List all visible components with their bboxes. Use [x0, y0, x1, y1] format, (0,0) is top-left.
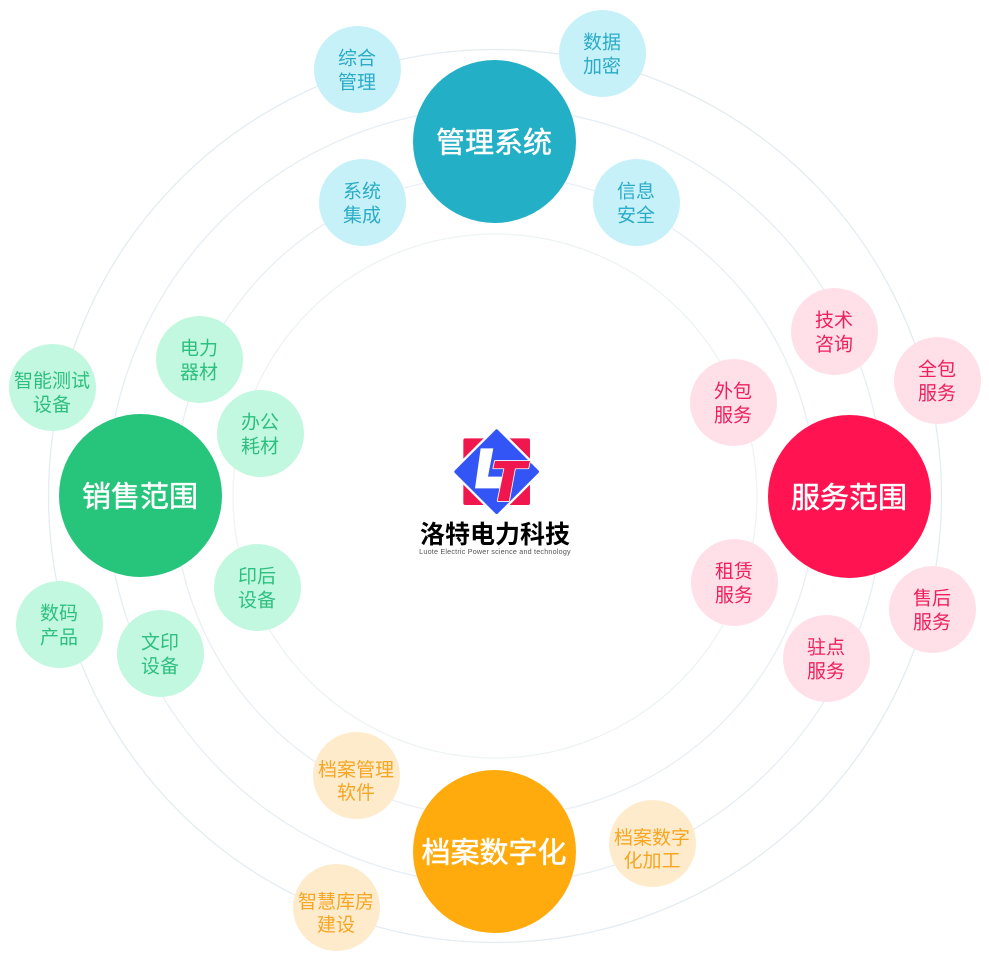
node: 数码产品: 产品: [40, 626, 78, 648]
node: 档案数字化加工: [609, 800, 696, 887]
logo icon: LT diamond: [456, 431, 537, 512]
panel: management systems: [314, 10, 680, 246]
node: 智慧库房建设: [293, 864, 380, 951]
node: 档案管理软件: [313, 732, 400, 819]
node: 信息安全: 安全: [617, 204, 655, 226]
node: 电力器材: 电力: [180, 338, 218, 360]
node: 技术咨询: 技术: [815, 310, 853, 332]
node: 租赁服务: 租赁: [715, 560, 753, 582]
node: 数码产品: [16, 581, 103, 668]
node: 印后设备: 印后: [238, 566, 276, 588]
node: 系统集成: [319, 159, 406, 246]
node: 外包服务: 服务: [714, 404, 752, 426]
node: 租赁服务: [691, 539, 778, 626]
node: 智慧库房建设: 建设: [317, 914, 355, 936]
hub: 档案数字化: 档案数字化: [421, 836, 567, 870]
node: 电力器材: 器材: [180, 362, 218, 384]
node: 智能测试设备: 智能测试: [14, 370, 90, 392]
node: 信息安全: [593, 159, 680, 246]
logo company name: 洛特电力科技: [420, 521, 570, 549]
node: 外包服务: [690, 359, 777, 446]
node: 信息安全: 信息: [617, 180, 655, 202]
node: 全包服务: 服务: [918, 382, 956, 404]
logo english tagline: Luote Electric Power science and technology: [419, 547, 571, 556]
hub: 销售范围: [59, 414, 222, 577]
node: 外包服务: 外包: [714, 380, 752, 402]
node: 售后服务: 售后: [913, 588, 951, 610]
node: 租赁服务: 服务: [715, 584, 753, 606]
panel: service scope: [690, 288, 981, 702]
node: 电力器材: [156, 316, 243, 403]
panel: archive digitization: [293, 732, 696, 951]
node: 智能测试设备: 设备: [33, 394, 71, 416]
node: 印后设备: [214, 544, 301, 631]
node: 综合管理: 管理: [338, 72, 376, 94]
node: 数据加密: [559, 10, 646, 97]
node: 驻点服务: 服务: [807, 660, 845, 682]
node: 智慧库房建设: 智慧库房: [298, 891, 374, 913]
node: 综合管理: 综合: [338, 48, 376, 70]
node: 档案管理软件: 软件: [337, 782, 375, 804]
center logo: [419, 431, 571, 556]
panel: sales scope: [9, 316, 304, 697]
node: 档案管理软件: 档案管理: [318, 759, 394, 781]
node: 技术咨询: 咨询: [815, 334, 853, 356]
node: 驻点服务: [783, 615, 870, 702]
node: 档案数字化加工: 档案数字: [614, 827, 690, 849]
node: 智能测试设备: [9, 344, 96, 431]
node: 办公耗材: 耗材: [241, 436, 279, 458]
node: 办公耗材: 办公: [241, 412, 279, 434]
hub: 档案数字化: [413, 770, 576, 933]
node: 系统集成: 集成: [343, 204, 381, 226]
node: 数据加密: 加密: [583, 56, 621, 78]
node: 技术咨询: [791, 288, 878, 375]
hub: 服务范围: 服务范围: [791, 482, 907, 514]
node: 办公耗材: [217, 390, 304, 477]
hub: 销售范围: 销售范围: [82, 480, 198, 514]
hub: 管理系统: 管理系统: [436, 126, 552, 160]
node: 数码产品: 数码: [40, 602, 78, 624]
hub: 服务范围: [768, 415, 931, 578]
hub: 管理系统: [413, 60, 576, 223]
node: 系统集成: 系统: [343, 180, 381, 202]
node: 全包服务: [894, 337, 981, 424]
node: 档案数字化加工: 化加工: [623, 850, 681, 872]
node: 印后设备: 设备: [238, 590, 276, 612]
node: 售后服务: 服务: [913, 612, 951, 634]
node: 全包服务: 全包: [918, 358, 956, 380]
node: 售后服务: [889, 566, 976, 653]
node: 文印设备: [117, 610, 204, 697]
node: 文印设备: 文印: [141, 632, 179, 654]
node: 文印设备: 设备: [141, 656, 179, 678]
node: 驻点服务: 驻点: [807, 636, 845, 658]
node: 综合管理: [314, 26, 401, 113]
node: 数据加密: 数据: [583, 32, 621, 54]
